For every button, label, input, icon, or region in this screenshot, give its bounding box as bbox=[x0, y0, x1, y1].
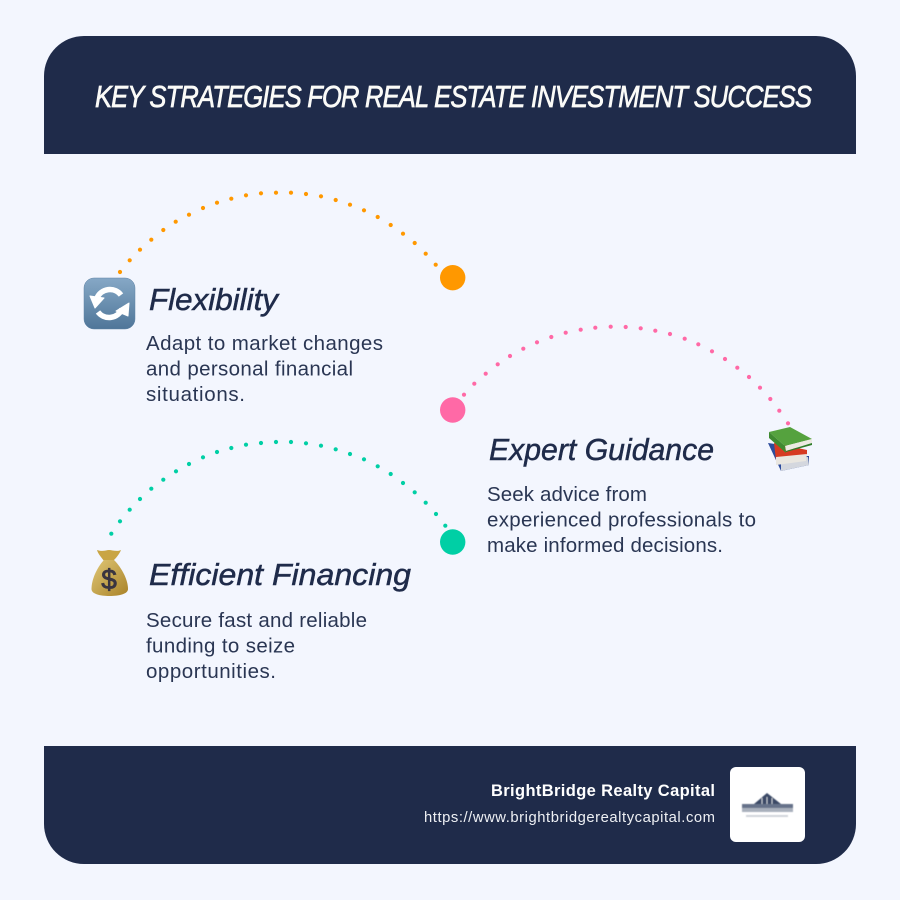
text: efficient financing description: opportunities. bbox=[146, 660, 276, 683]
heading: expert guidance: Expert Guidance bbox=[489, 432, 714, 467]
text: expert guidance description: experienced professionals to bbox=[487, 508, 756, 532]
text: efficient financing description bbox=[146, 609, 367, 683]
text: efficient financing description: Secure fast and reliable bbox=[146, 609, 367, 632]
icon: refresh arrows bbox=[84, 278, 135, 329]
text: flexibility description: Adapt to market changes bbox=[146, 332, 383, 355]
arc: efficient financing bbox=[109, 440, 465, 555]
text: flexibility description: and personal financial bbox=[146, 358, 353, 380]
arc: expert guidance bbox=[440, 325, 790, 425]
footer banner bbox=[44, 746, 856, 864]
panel: expert guidance bbox=[487, 427, 812, 557]
text: flexibility description bbox=[146, 332, 383, 406]
panel: flexibility bbox=[84, 278, 383, 406]
text: efficient financing description: funding to seize bbox=[146, 634, 295, 658]
company url: https://www.brightbridgerealtycapital.com bbox=[424, 810, 715, 826]
text: expert guidance description bbox=[487, 483, 756, 557]
heading: flexibility: Flexibility bbox=[149, 282, 281, 317]
header banner bbox=[44, 36, 856, 154]
arc: flexibility bbox=[118, 191, 465, 290]
text: expert guidance description: make informed decisions. bbox=[487, 534, 723, 557]
text: flexibility description: situations. bbox=[146, 383, 245, 406]
logo bbox=[730, 767, 805, 842]
heading: efficient financing: Efficient Financing bbox=[149, 557, 411, 592]
icon: money bag bbox=[92, 550, 128, 596]
icon: money bag: $ bbox=[101, 564, 117, 595]
company name: BrightBridge Realty Capital bbox=[491, 782, 715, 800]
panel: efficient financing bbox=[92, 550, 411, 683]
title: KEY STRATEGIES FOR REAL ESTATE INVESTMENT SUCCESS bbox=[95, 80, 812, 113]
text: expert guidance description: Seek advice from bbox=[487, 483, 647, 506]
icon: books bbox=[768, 427, 812, 471]
